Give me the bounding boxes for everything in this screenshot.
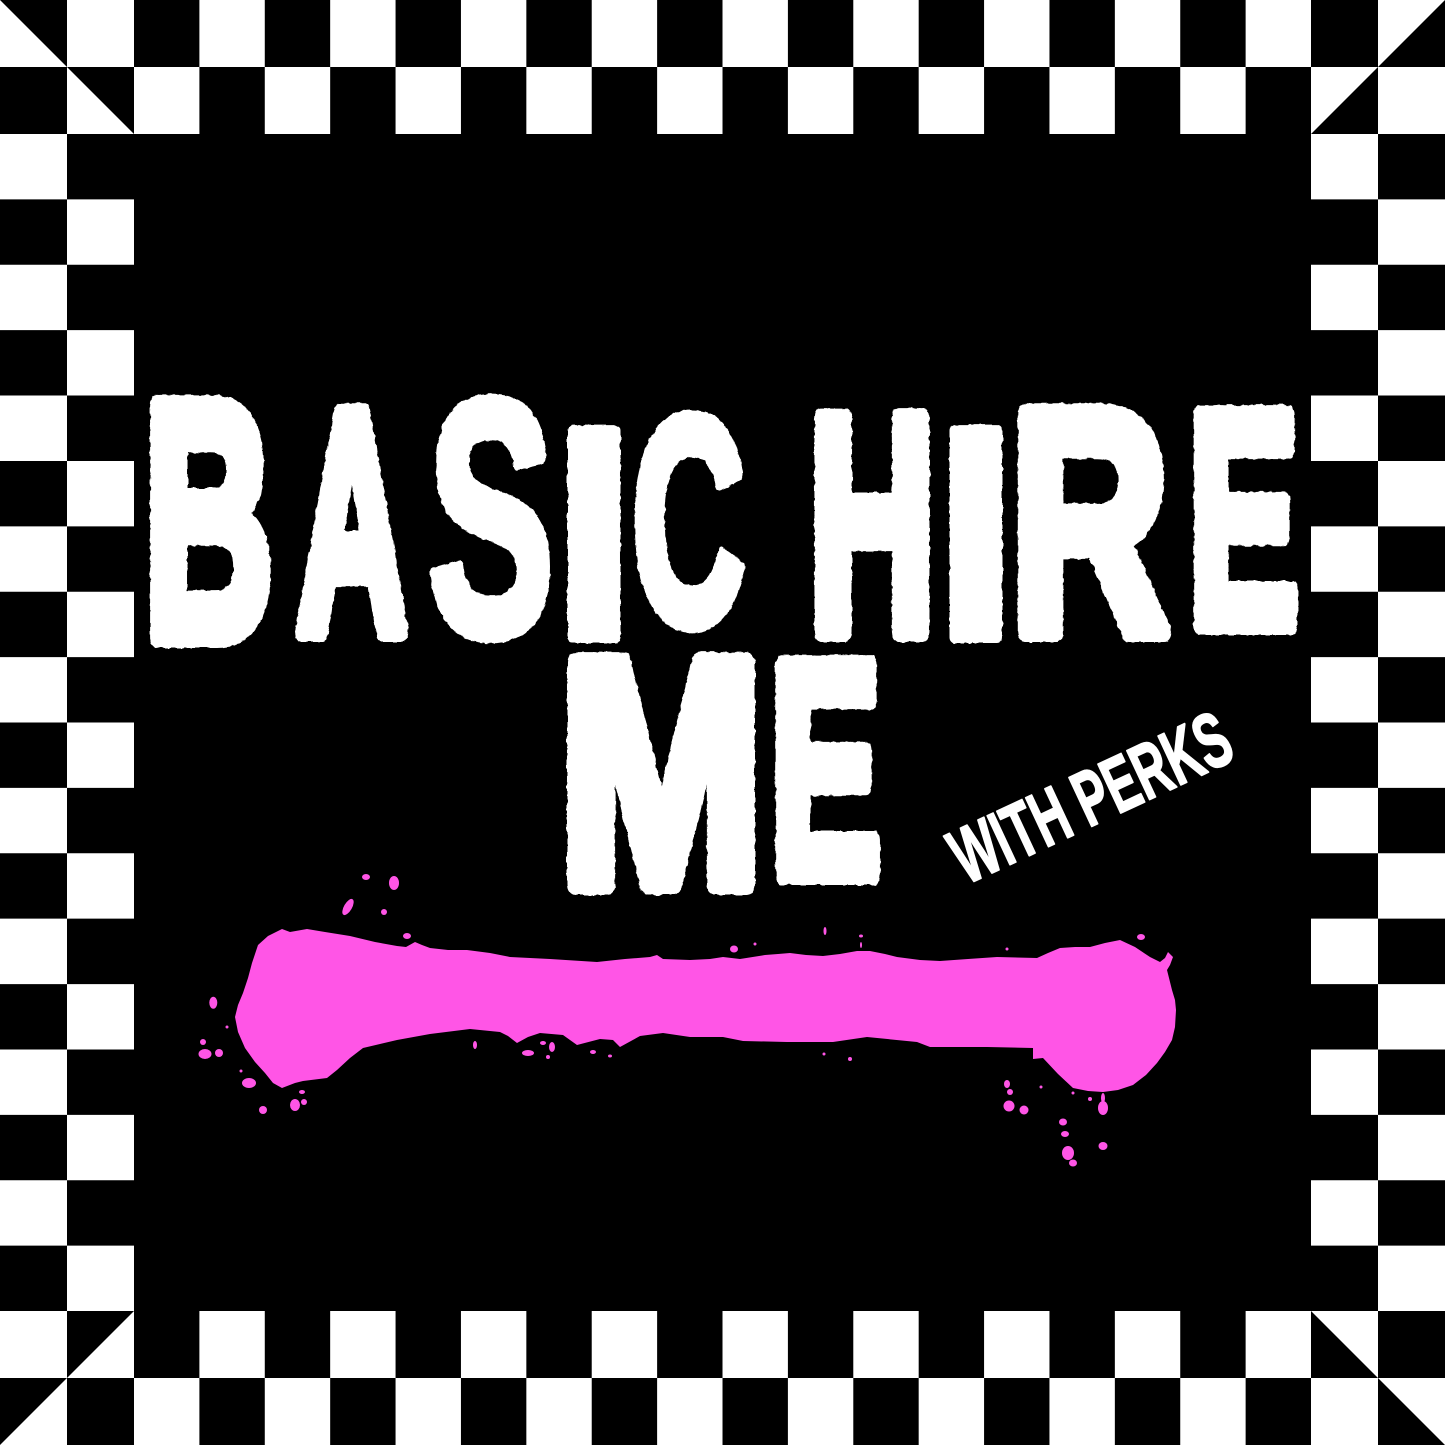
title line: BASIC HIRE: S xyxy=(428,331,554,705)
border: left columns xyxy=(0,134,134,1311)
title line: BASIC HIRE: I xyxy=(936,365,1016,701)
paint splatter droplets xyxy=(198,874,1145,1166)
border: top rows xyxy=(67,0,1445,134)
border: bottom rows xyxy=(0,1311,1378,1445)
brush stroke body xyxy=(235,929,1176,1092)
title line: BASIC HIRE: H xyxy=(809,353,935,697)
title xyxy=(144,331,1299,953)
title line: BASIC HIRE: E xyxy=(1188,349,1299,690)
title line: ME: E xyxy=(770,599,881,940)
title line: BASIC HIRE: A xyxy=(297,346,407,698)
pink spray paint stroke xyxy=(198,874,1176,1166)
title line: ME: M xyxy=(559,594,763,953)
title line: BASIC HIRE: B xyxy=(144,334,273,709)
title line: BASIC HIRE: R xyxy=(1010,345,1169,700)
title line: BASIC HIRE: I xyxy=(554,365,634,701)
subtitle: with perks: WITH PERKS xyxy=(936,694,1245,900)
title line: BASIC HIRE: C xyxy=(632,356,745,686)
border: right columns xyxy=(1311,134,1445,1311)
